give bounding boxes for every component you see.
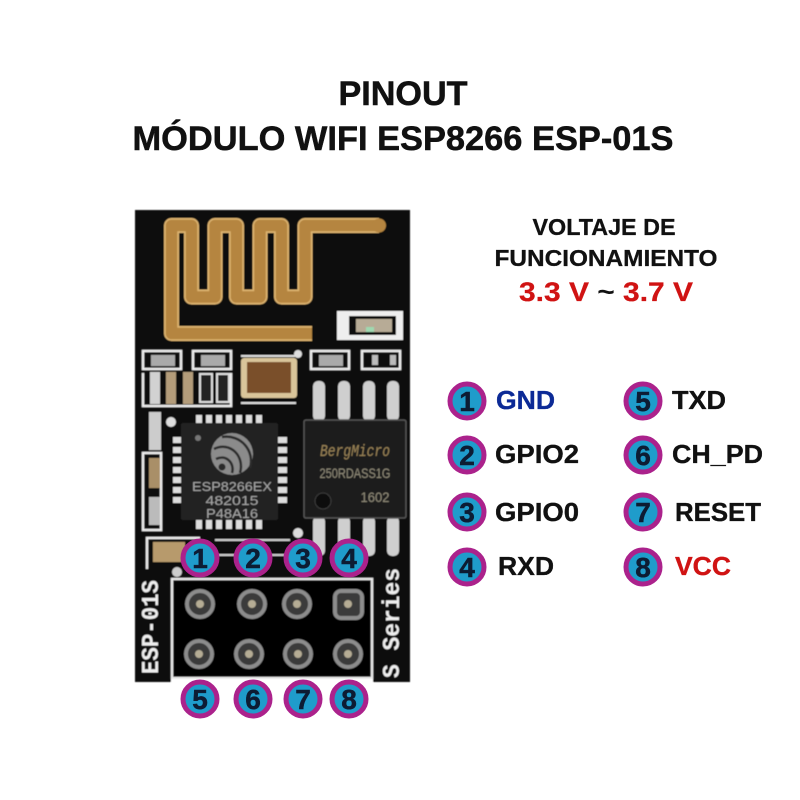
pin legend [450,384,763,584]
SMD components top row [143,350,400,369]
flash memory chip [304,381,406,556]
board pin markers: 2 [245,543,261,574]
icon: Espressif logo [211,433,253,475]
voltage text block: VOLTAJE DE [532,214,676,240]
title: PINOUT [338,75,468,113]
board pin markers: 3 [295,543,311,574]
chip markings: ESP8266EX [192,479,272,494]
legend: pin 2 GPIO2: 2 [459,440,475,471]
flash memory chip: 1602 [360,489,390,505]
ESP8266EX chip [173,415,287,529]
board label: ESP-01S: ESP-01S [139,580,166,674]
chip markings [192,479,272,521]
legend: pin 6 CH_PD [626,438,763,472]
legend: pin 4 RXD [450,550,554,584]
board pin markers: 5 [192,684,208,715]
legend: pin 5 TXD: TXD [672,385,726,415]
chip markings: P48A16 [206,506,258,521]
legend: pin 2 GPIO2: GPIO2 [495,439,579,469]
legend: pin 4 RXD: RXD [498,551,554,581]
board pin markers [183,541,366,716]
icon: PCB meander antenna [172,218,386,334]
flash memory chip: 250RDASS1G [320,465,390,481]
title [132,75,674,158]
flash memory chip: BergMicro [320,443,390,462]
legend: pin 6 CH_PD: CH_PD [672,439,763,469]
crystal oscillator [241,358,297,403]
board body [135,210,410,682]
board pin markers: 1 [192,543,208,574]
legend: pin 6 CH_PD: 6 [635,440,651,471]
legend: pin 1 GND [450,384,555,418]
panel: ESP-01S board [135,210,410,683]
board pin markers: 8 [341,684,357,715]
legend: pin 7 RESET: 7 [635,497,651,528]
legend: pin 7 RESET: RESET [675,497,761,527]
legend: pin 8 VCC: VCC [675,551,731,581]
legend: pin 1 GND: GND [496,385,555,415]
legend: pin 5 TXD: 5 [635,386,651,417]
legend: pin 3 GPIO0 [450,495,579,529]
legend: pin 8 VCC [626,550,731,584]
LED component [337,311,403,340]
board pin markers: 7 [295,684,311,715]
legend: pin 1 GND: 1 [459,386,475,417]
voltage text block: FUNCIONAMIENTO [494,245,718,271]
legend: pin 2 GPIO2 [450,438,579,472]
board pin markers: 6 [245,684,261,715]
legend: pin 4 RXD: 4 [459,552,475,583]
legend: pin 5 TXD [626,384,726,418]
title: MÓDULO WIFI ESP8266 ESP-01S [132,120,674,158]
solder pins [186,591,362,667]
legend: pin 3 GPIO0: 3 [459,497,475,528]
voltage text block [494,214,718,307]
pin header area [171,579,373,683]
voltage text block: 3.3 V ~ 3.7 V [519,277,693,307]
legend: pin 8 VCC: 8 [635,552,651,583]
board pin markers: 4 [341,543,357,574]
chip markings: 482015 [206,493,258,508]
legend: pin 3 GPIO0: GPIO0 [495,497,579,527]
legend: pin 7 RESET [626,495,761,529]
SMD components left column [143,372,303,577]
board label: S Series: S Series [380,568,407,678]
